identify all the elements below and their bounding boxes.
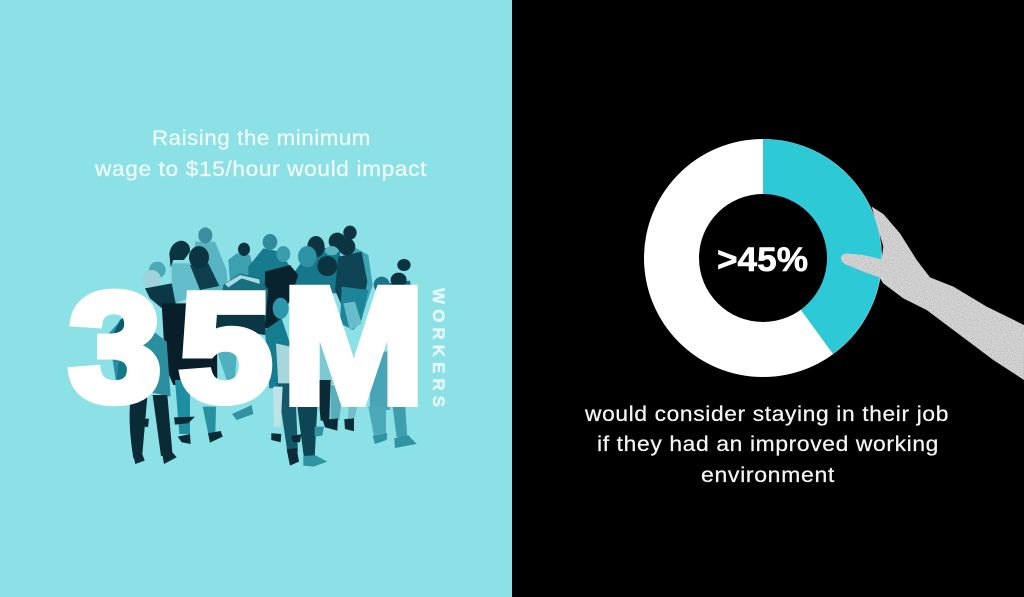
text block: job retention statement: would consider staying in their job — [584, 403, 949, 426]
chart: donut — [644, 139, 882, 377]
text block: job retention statement — [584, 403, 949, 487]
text block: job retention statement: environment — [701, 464, 835, 487]
big number: 35M: 5 — [179, 262, 272, 433]
big number: 35M — [69, 254, 425, 439]
panel: right black background — [512, 0, 1024, 597]
text block: job retention statement: if they had an improved working — [597, 433, 939, 456]
heads — [142, 226, 411, 319]
label: workers, vertical: WORKERS — [429, 288, 448, 407]
icon: arm holding donut — [841, 207, 1024, 380]
shoes — [133, 417, 354, 466]
back row torsos — [193, 242, 228, 293]
heading: minimum wage intro — [94, 127, 427, 181]
legs — [130, 380, 331, 458]
value: greater than 45 percent: >45% — [717, 241, 808, 279]
big number: 35M: 3 — [69, 262, 161, 433]
heading: minimum wage intro: wage to $15/hour would impact — [94, 158, 427, 181]
big number: 35M: M — [282, 254, 425, 439]
panel: left cyan background — [0, 0, 512, 597]
heading: minimum wage intro: Raising the minimum — [152, 127, 371, 150]
middle torsos — [145, 283, 176, 310]
illustration: crowd of workers — [108, 226, 417, 467]
